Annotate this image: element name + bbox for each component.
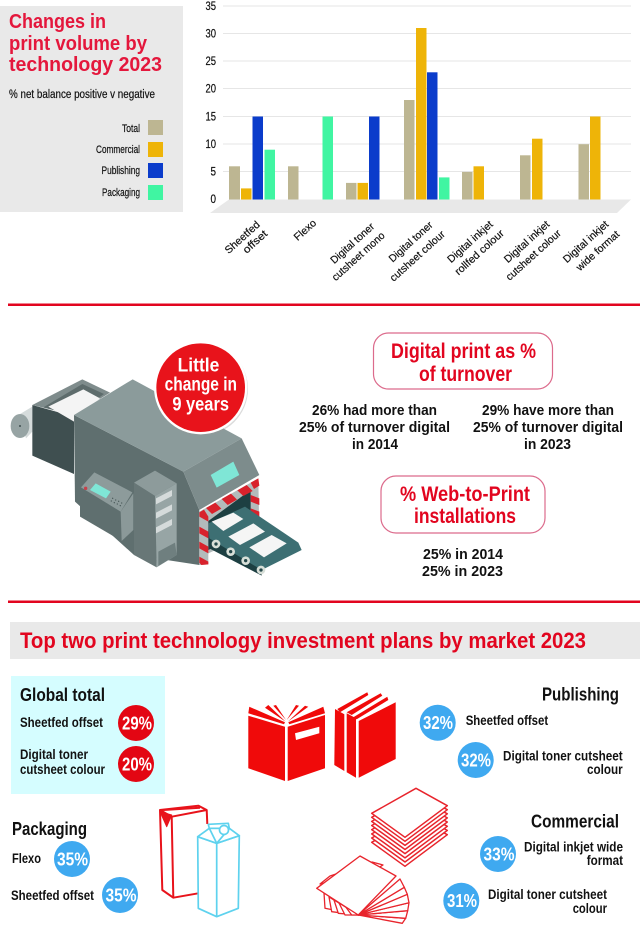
panel: publishing — [420, 685, 623, 778]
x axis labels: Digital inkjet — [445, 218, 496, 266]
bars: packaging — [264, 116, 450, 200]
y axis labels — [206, 1, 216, 206]
panel: publishing: Publishing — [542, 685, 619, 705]
y axis labels: 30 — [206, 28, 216, 40]
panel: packaging: 35% — [106, 886, 136, 906]
legend: Total — [122, 123, 140, 135]
badge: little change in 9 years: 9 years — [172, 395, 229, 416]
legend: Publishing — [102, 165, 140, 177]
panel: global total: Digital toner — [20, 747, 89, 762]
panel: publishing: 32% — [423, 713, 453, 733]
legend: Packaging — [102, 187, 140, 199]
x axis labels: Flexo — [292, 217, 319, 244]
text: 2014 digital share — [299, 402, 450, 453]
control console — [80, 488, 122, 541]
y axis labels: 25 — [206, 56, 216, 68]
panel: commercial: Digital inkjet wide — [524, 840, 623, 855]
panel: global total: 29% — [122, 714, 152, 734]
y axis labels: 0 — [210, 194, 216, 206]
panel: global total: cutsheet colour — [20, 762, 106, 777]
icon: fanned paper sheets — [317, 856, 409, 923]
subtitle: % net balance positive v negative — [9, 89, 155, 101]
y axis labels: 10 — [206, 139, 216, 151]
bar chart: print volume by technology — [206, 1, 631, 284]
tower unit — [134, 471, 177, 496]
panel: commercial: 31% — [447, 891, 477, 911]
x axis labels: wide format — [573, 228, 622, 274]
conveyor belt — [209, 537, 262, 576]
x axis labels: Digital inkjet — [561, 218, 611, 266]
badge: little change in 9 years: change in — [165, 375, 237, 396]
callout: digital print as % of turnover: of turnover — [419, 363, 512, 386]
x axis labels: cutsheet mono — [330, 230, 388, 284]
panel: commercial: Digital toner cutsheet — [488, 887, 607, 902]
panel: global total: 20% — [122, 754, 152, 774]
panel: packaging: 35% — [57, 850, 88, 870]
x axis labels: Digital toner — [387, 219, 436, 265]
x axis labels: rollfed colour — [453, 227, 507, 278]
panel: global total: Global total — [20, 685, 105, 705]
title — [9, 11, 162, 76]
icon: open book — [248, 705, 325, 781]
text: 2023 digital share: 25% of turnover digital — [473, 419, 623, 436]
x axis labels: Digital inkjet — [502, 218, 552, 266]
callout: digital print as % of turnover: Digital print as % — [391, 340, 536, 363]
bars: total — [229, 100, 589, 200]
panel: commercial: Commercial — [531, 812, 619, 832]
text: web-to-print figures — [422, 546, 504, 580]
callout: % web-to-print installations — [381, 476, 545, 533]
callout: % web-to-print installations: % Web-to-Print — [400, 483, 530, 506]
x axis labels: Sheetfed — [223, 219, 263, 257]
text: web-to-print figures: 25% in 2014 — [423, 546, 504, 563]
heading: top two print technology investment plans — [10, 622, 640, 659]
panel: publishing: Sheetfed offset — [466, 713, 549, 728]
x axis labels: cutsheet colour — [388, 228, 448, 284]
y axis labels: 20 — [206, 84, 216, 96]
text: 2023 digital share: 29% have more than — [482, 402, 614, 419]
panel: publishing: 32% — [461, 750, 491, 770]
text: 2014 digital share: in 2014 — [352, 436, 399, 453]
bars: commercial — [241, 28, 600, 200]
hazard frame — [199, 478, 259, 565]
x axis labels: cutsheet colour — [504, 227, 564, 283]
text: 2023 digital share — [473, 402, 623, 453]
legend — [96, 120, 163, 200]
panel: publishing: colour — [587, 762, 623, 777]
icon: standing books — [334, 692, 396, 778]
text: 2014 digital share: 25% of turnover digital — [299, 419, 450, 436]
panel: commercial: 33% — [484, 844, 514, 864]
panel: packaging — [11, 819, 138, 913]
badge: little change in 9 years — [154, 341, 248, 436]
panel: chart title and legend — [0, 6, 183, 212]
heading: top two print technology investment plans: Top two print technology investment plans by market 2023 — [20, 628, 586, 653]
text: 2014 digital share: 26% had more than — [312, 402, 437, 419]
panel: commercial: colour — [573, 901, 608, 916]
text: 2023 digital share: in 2023 — [524, 436, 571, 453]
callout: digital print as % of turnover — [374, 333, 552, 389]
title: Changes in — [9, 11, 106, 33]
bars: publishing — [252, 72, 438, 200]
text: web-to-print figures: 25% in 2023 — [422, 563, 503, 580]
icon: milk carton — [198, 823, 239, 917]
panel: publishing: Digital toner cutsheet — [503, 749, 623, 764]
x axis labels: offset — [241, 228, 270, 256]
legend: Commercial — [96, 144, 140, 156]
panel: commercial: format — [587, 853, 623, 868]
title: print volume by — [9, 33, 148, 55]
icon: paper stack — [372, 788, 447, 866]
panel: packaging: Flexo — [12, 851, 41, 866]
panel: packaging: Sheetfed offset — [11, 888, 94, 903]
panel: global total: Sheetfed offset — [20, 715, 103, 730]
x axis labels — [223, 217, 622, 284]
panel: packaging: Packaging — [12, 819, 87, 839]
x axis labels: Digital toner — [328, 220, 377, 267]
badge: little change in 9 years: Little — [178, 356, 219, 377]
icon: drinks carton — [160, 806, 207, 898]
icon: digital printing press — [11, 341, 302, 576]
callout: % web-to-print installations: installations — [414, 505, 516, 528]
title: technology 2023 — [9, 54, 162, 76]
panel: global total — [11, 676, 165, 794]
y axis labels: 35 — [206, 1, 216, 13]
y axis labels: 5 — [210, 166, 216, 178]
panel: commercial — [443, 812, 623, 919]
y axis labels: 15 — [206, 112, 216, 124]
